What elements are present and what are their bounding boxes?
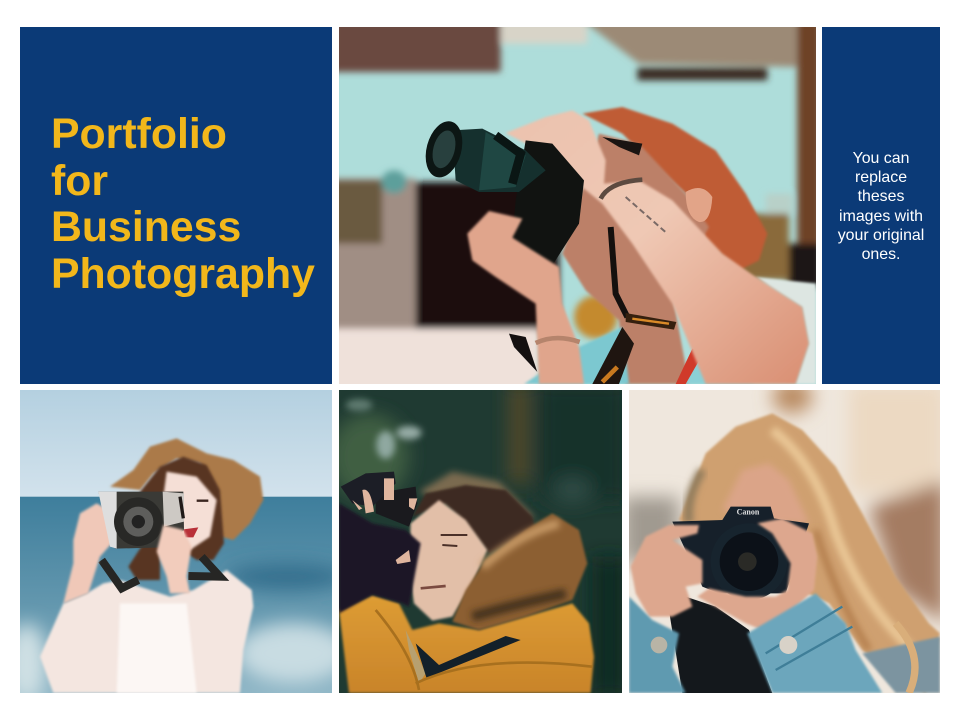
hair [582, 107, 767, 270]
note text: replace [855, 169, 907, 186]
denim jacket [629, 597, 686, 693]
bracelet and tattoo [601, 180, 642, 199]
right hand [157, 525, 192, 593]
panel: title background [20, 27, 332, 384]
hair [679, 413, 940, 693]
face [163, 472, 217, 550]
photo: blonde woman with Canon camera: Canon [737, 507, 760, 516]
photo: woman in yellow jacket [329, 383, 626, 697]
dress [40, 570, 253, 693]
hair [128, 457, 224, 580]
photo: photographer with red hair [332, 20, 821, 392]
holding hand [467, 211, 584, 384]
photo: woman with hat on beach [20, 390, 332, 693]
lower strap [611, 227, 627, 317]
left arm and hand [63, 503, 112, 603]
note text: your original [838, 227, 924, 244]
hands [631, 525, 702, 617]
note text: theses [858, 188, 904, 205]
title: Portfolio [51, 110, 227, 158]
note text: You can [853, 150, 909, 167]
forehead [722, 463, 809, 523]
far-right denim [862, 637, 940, 693]
raised arm [506, 110, 809, 384]
shirt [756, 277, 816, 384]
scarf [666, 590, 772, 693]
photo: blonde woman with Canon camera [622, 380, 946, 693]
instant camera [98, 492, 184, 549]
face [409, 500, 487, 621]
note text: images with [839, 208, 923, 225]
jacket [339, 595, 594, 693]
camera and gloves [339, 503, 421, 613]
note text [838, 150, 924, 263]
camera [512, 140, 584, 265]
strap [416, 636, 521, 677]
strap [102, 557, 220, 588]
title [51, 110, 315, 298]
fur hood [452, 513, 587, 630]
title: Photography [51, 250, 315, 298]
title: Business [51, 203, 241, 251]
note text: ones. [862, 246, 900, 263]
hat [110, 438, 263, 540]
hair [419, 472, 536, 523]
camera [672, 507, 809, 593]
title: for [51, 157, 108, 205]
panel: note background [822, 27, 940, 384]
face and neck [562, 134, 709, 384]
